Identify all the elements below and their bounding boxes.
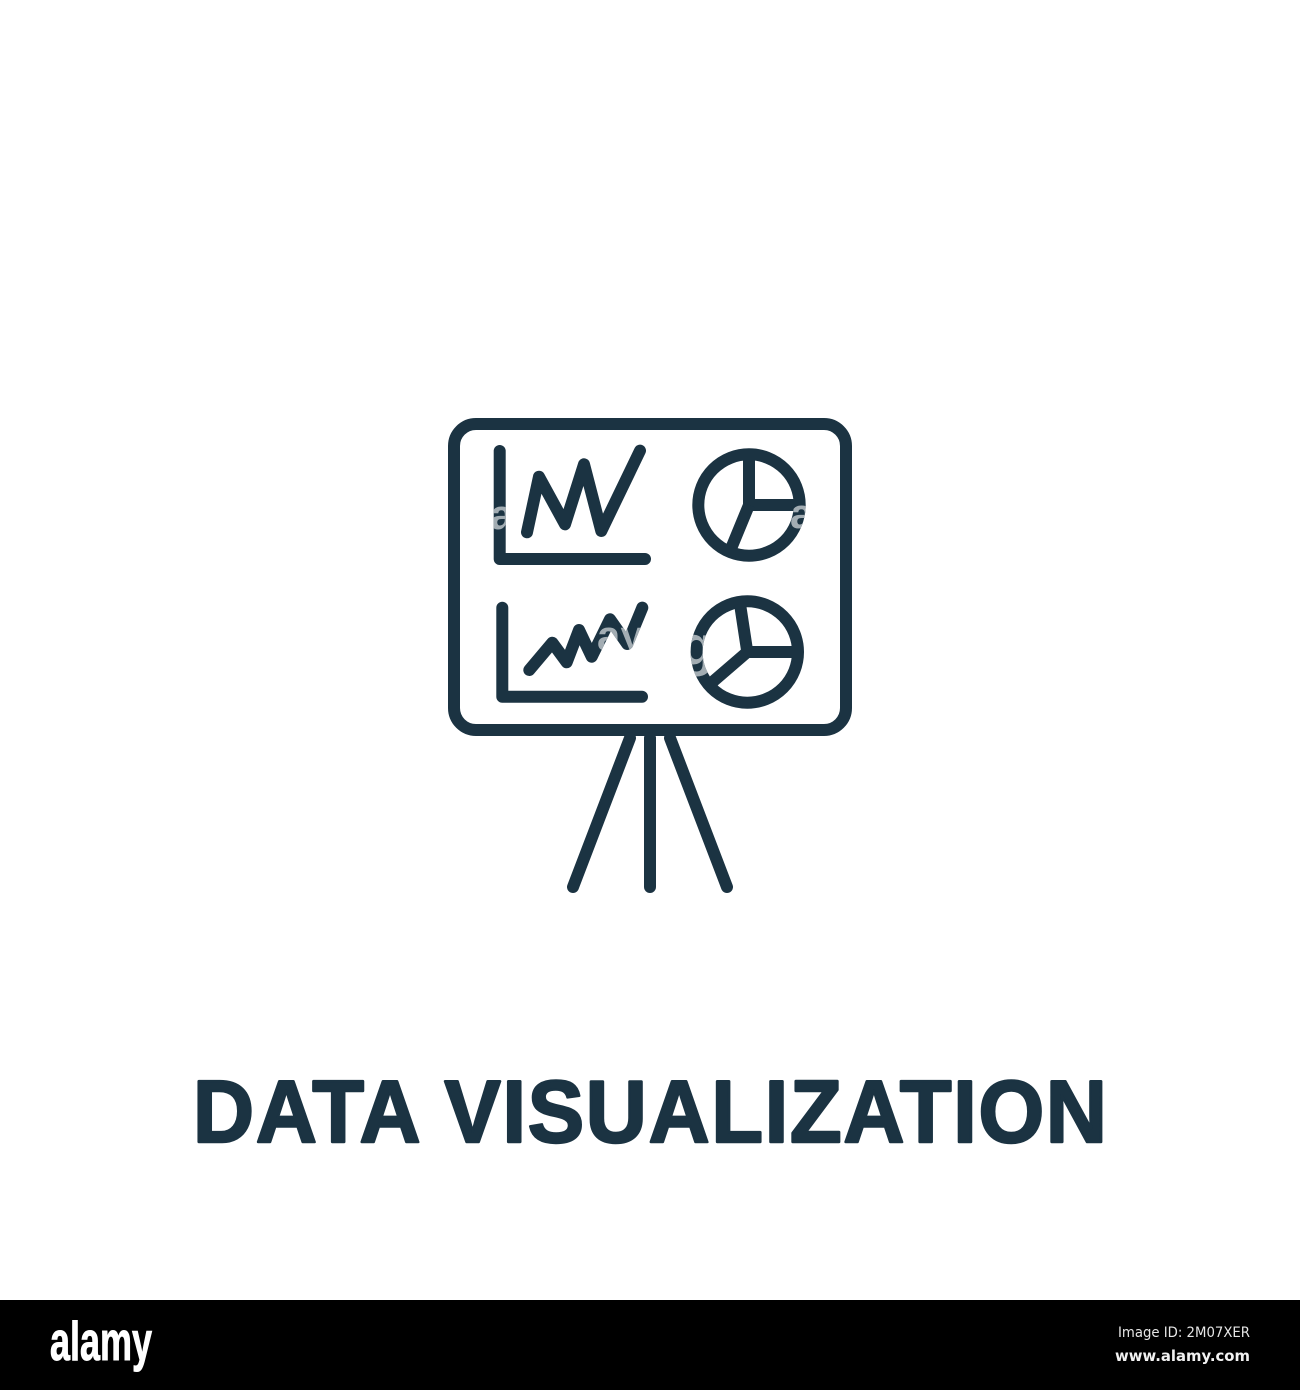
- image id: Image ID: 2M07XER: [1118, 1325, 1250, 1341]
- website: www.alamy.com: [1115, 1347, 1250, 1365]
- watermark fragments: a: [490, 491, 514, 538]
- title: DATA VISUALIZATION: [193, 1063, 1107, 1161]
- watermark fragments: g: [680, 614, 714, 677]
- board frame: [454, 424, 846, 730]
- infographic canvas: [0, 418, 1300, 1390]
- line chart: top: [500, 451, 645, 559]
- line chart: bottom: [502, 608, 642, 697]
- tripod legs: [573, 738, 727, 887]
- watermark fragments: a: [790, 490, 814, 537]
- icon: presentation board on tripod: [454, 424, 846, 887]
- pie chart: top: [698, 454, 800, 556]
- pie chart: bottom: [697, 601, 798, 703]
- footer logo: alamy: [50, 1310, 152, 1372]
- watermark fragments: [494, 506, 806, 676]
- watermark fragments: ay: [597, 612, 644, 659]
- footer bar: [0, 1300, 1300, 1390]
